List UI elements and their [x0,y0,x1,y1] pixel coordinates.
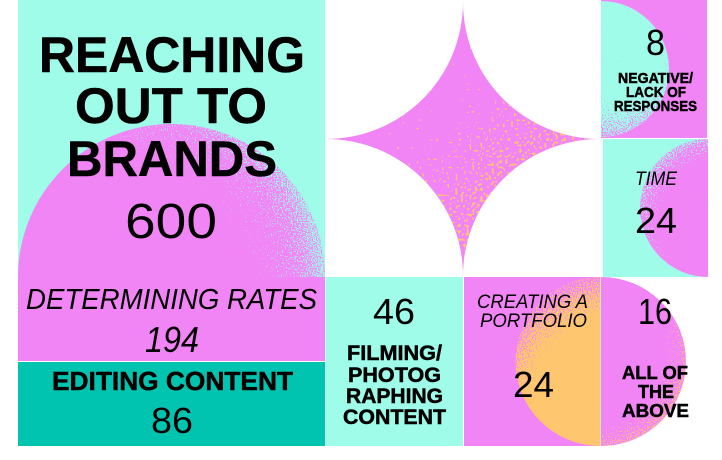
label: PORTFOLIO [480,311,587,332]
value: 194 [145,319,199,360]
panel: determining rates [18,277,325,361]
semicircle with speckle [18,120,325,277]
title: REACHING [39,27,305,83]
label: RESPONSES [614,98,697,115]
icon: four-point star [325,2,600,276]
value: 46 [373,291,415,332]
panel: time [603,139,708,277]
panel: reaching out to brands [18,0,325,277]
label [614,70,697,115]
value: 86 [151,400,193,441]
label [343,342,446,429]
label: LACK OF [626,84,686,101]
label [622,363,689,421]
value: 24 [635,200,677,241]
semicircle with speckle [601,0,671,138]
value: 8 [646,22,665,63]
label [477,292,588,332]
label: RAPHING [346,385,443,408]
label: ABOVE [622,401,689,421]
label: EDITING CONTENT [52,366,293,396]
title: OUT TO [75,78,267,134]
label: CONTENT [343,406,446,429]
label: ALL OF [622,363,688,383]
panel: editing content [18,362,325,446]
value: 16 [638,291,672,332]
panel: filming and photographing content [326,277,463,446]
title: BRANDS [67,131,277,187]
label: TIME [635,169,677,190]
total value: 600 [125,195,217,249]
panel: negative or lack of responses [601,0,707,138]
value: 24 [513,364,554,405]
title [39,27,305,187]
panel: all of the above [601,277,689,446]
semicircle with speckle [638,139,708,277]
semicircle with speckle [601,277,688,446]
label: THE [638,382,674,402]
panel: creating a portfolio [464,277,601,446]
label: DETERMINING RATES [26,284,318,316]
semicircle with speckle [514,277,601,446]
label: FILMING/ [347,342,442,365]
label: CREATING A [477,292,588,313]
label: PHOTOG [348,364,441,387]
label: NEGATIVE/ [618,70,694,87]
